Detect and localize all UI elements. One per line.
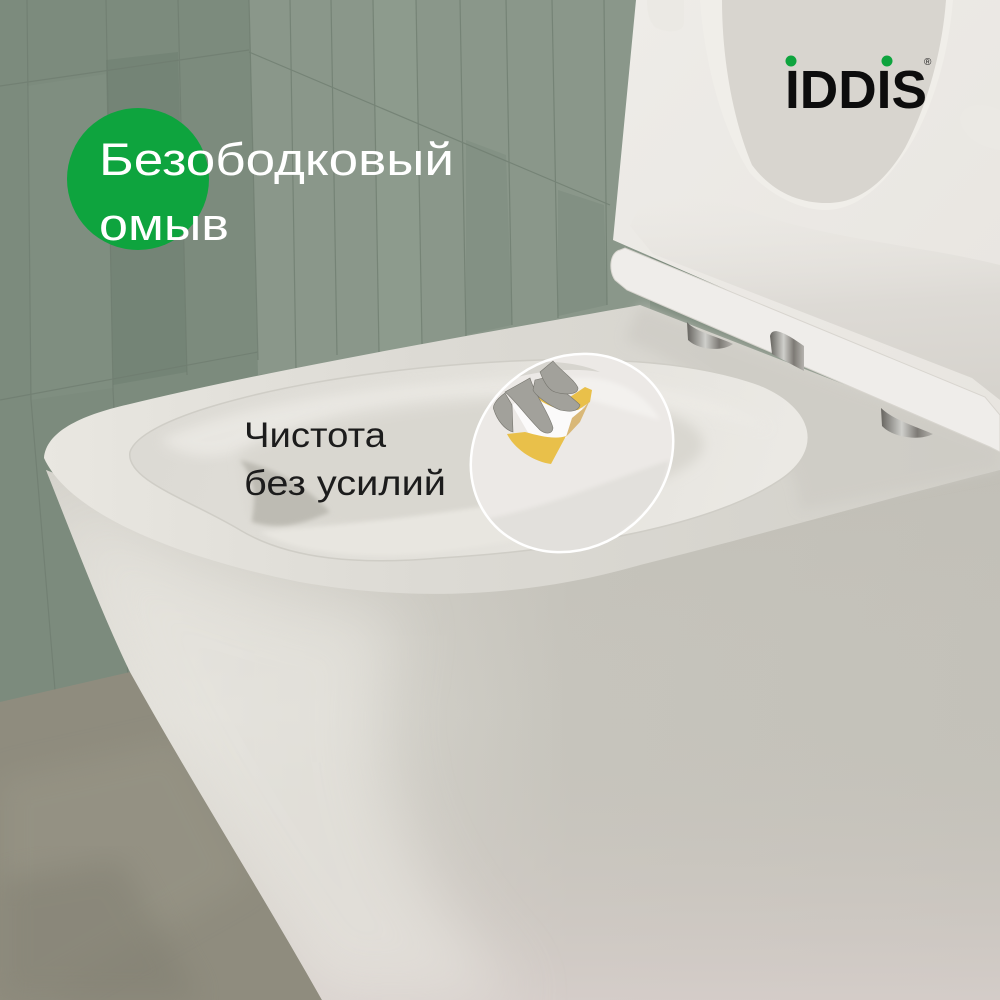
logo: IDDIS: ® [924,57,932,68]
rubber glove [493,361,580,433]
toilet bowl body [46,430,1000,1000]
callout circle: cleaning with sponge [470,352,674,554]
toilet bowl opening [130,360,808,561]
inset lens background [472,355,672,551]
seat hinge hardware [687,322,933,438]
caption: effortless cleanliness: Чистота [244,416,387,455]
caption: effortless cleanliness: без усилий [244,464,446,503]
background: stone floor [0,672,330,1000]
open toilet seat lid [611,0,1000,452]
heading: rimless flush: Безободковый [99,134,454,185]
logo: IDDIS: IDDIS [785,60,927,120]
sponge [507,385,592,464]
heading: rimless flush [99,134,454,250]
caption: effortless cleanliness [244,416,446,503]
badge: green circle [67,108,209,250]
toilet rim [44,305,1000,594]
heading: rimless flush: омыв [99,199,229,250]
background: tiled green wall [0,0,1000,720]
